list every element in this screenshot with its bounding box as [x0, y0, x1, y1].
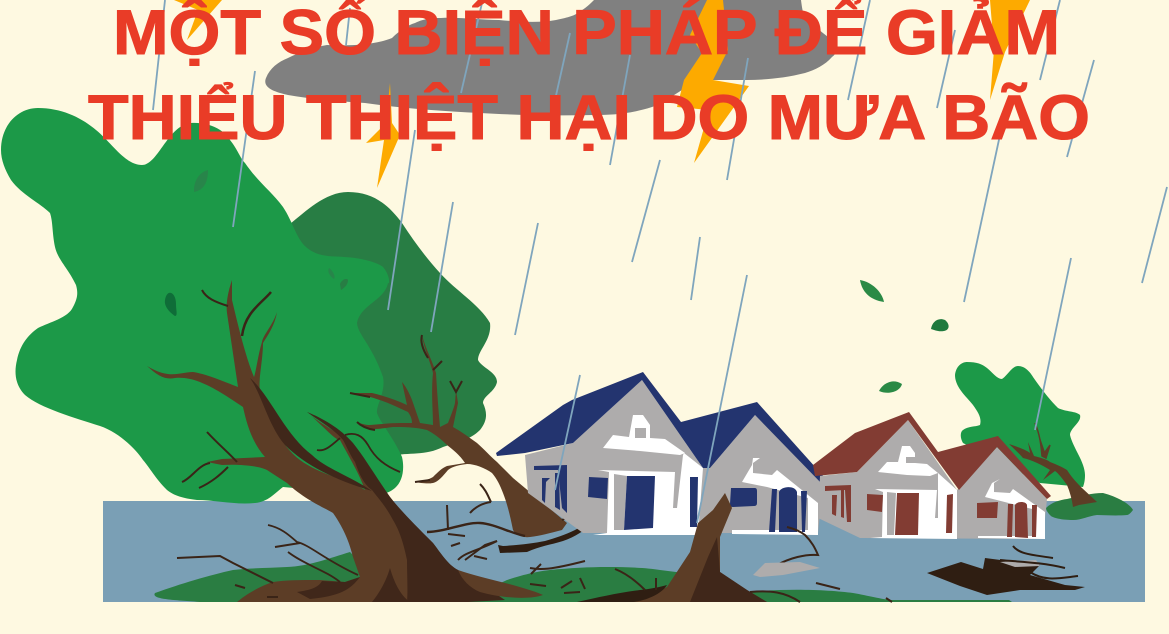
rear bent tree	[350, 335, 595, 560]
red house door and windows	[825, 485, 1037, 538]
rain streaks	[153, 0, 1167, 523]
rear tree trunk	[350, 335, 567, 537]
water	[103, 501, 1145, 602]
gray rock	[753, 562, 820, 577]
ground patches	[154, 493, 1133, 602]
flying leaves	[860, 280, 949, 393]
main fallen tree	[147, 280, 585, 602]
broken stump	[577, 493, 892, 602]
red house roof	[813, 412, 1051, 499]
right tree trunk	[1009, 442, 1097, 507]
title: MỘT SỐ BIỆN PHÁP ĐỂ GIẢM	[113, 0, 1060, 68]
right tree canopy	[955, 362, 1085, 487]
storm cloud	[265, 0, 836, 115]
debris twigs	[1000, 546, 1078, 578]
navy house	[496, 372, 825, 535]
trunk shadow	[250, 378, 372, 491]
lightning bolts	[174, 0, 1030, 188]
stump twigs	[615, 527, 892, 602]
title	[88, 0, 1090, 153]
navy house white facade	[603, 415, 685, 455]
floating debris	[927, 546, 1085, 595]
navy house gray walls	[525, 380, 823, 533]
navy house door and windows	[534, 465, 807, 532]
tree: front canopy	[1, 108, 403, 503]
branch debris	[498, 522, 595, 553]
canopy leaf marks	[165, 170, 348, 316]
red house	[813, 412, 1051, 539]
red house white facade	[878, 446, 938, 476]
main tree twigs	[177, 290, 585, 597]
stump trunk	[577, 493, 767, 602]
rear tree twigs	[350, 335, 571, 560]
tree: back dark canopy	[290, 192, 497, 456]
right distant tree	[955, 362, 1097, 507]
title: THIỂU THIỆT HẠI DO MƯA BÃO	[88, 82, 1090, 153]
debris mass	[927, 558, 1085, 595]
main tree trunk	[147, 280, 467, 602]
red house gray walls	[818, 420, 1047, 539]
navy house roof	[496, 372, 825, 485]
